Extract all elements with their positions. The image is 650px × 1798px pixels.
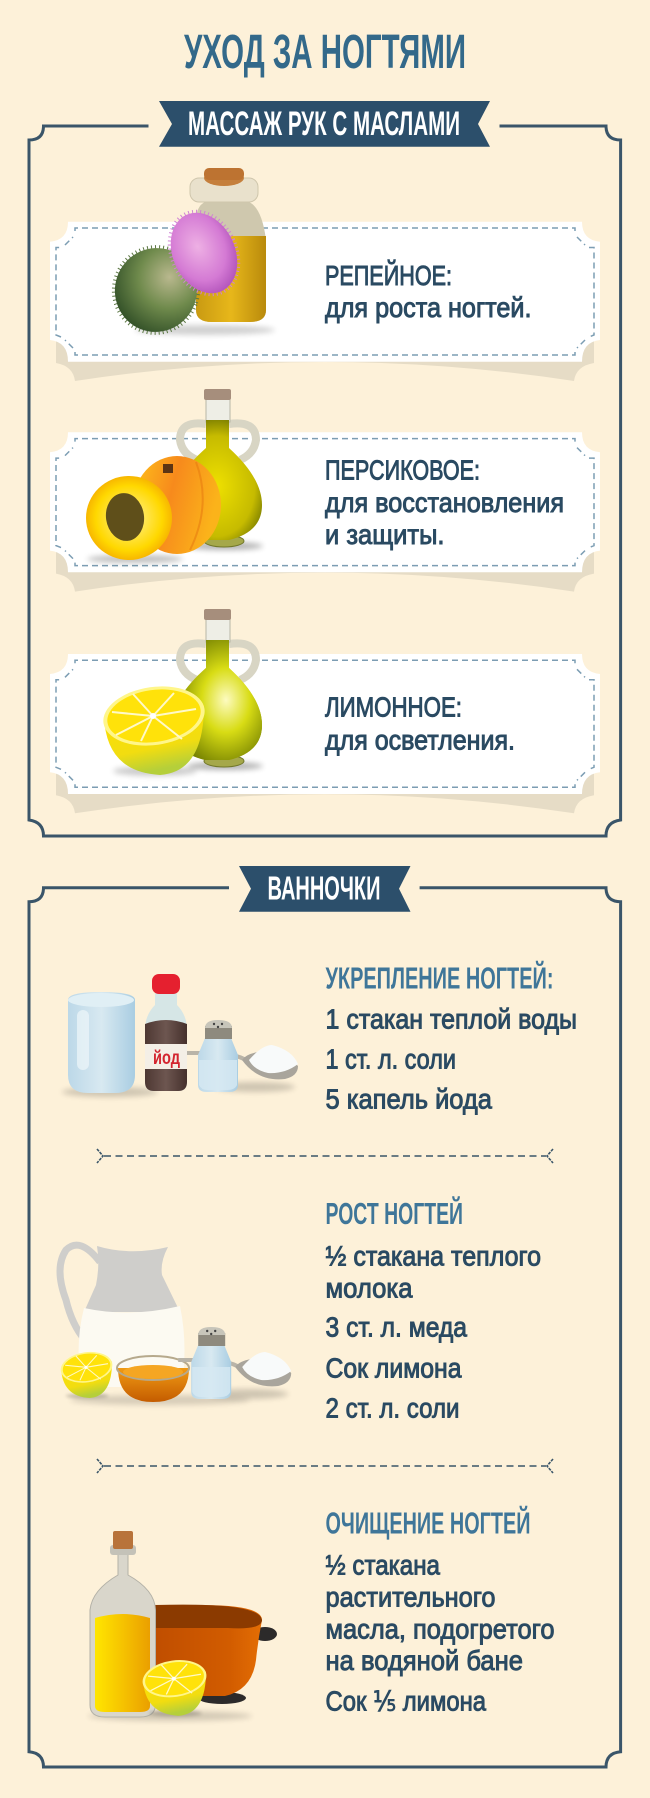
panel: nail baths — [29, 866, 621, 1767]
icon: glass, iodine, salt: йод — [153, 1048, 180, 1069]
ribbon heading: massage: МАССАЖ РУК С МАСЛАМИ — [188, 105, 460, 143]
recipe text: growth: 2 ст. л. соли — [326, 1393, 460, 1424]
recipe text: strengthening: 1 стакан теплой воды — [326, 1003, 577, 1034]
card text: peach: для восстановления — [325, 487, 564, 518]
recipe: cleansing — [88, 1504, 554, 1721]
card text: burdock: РЕПЕЙНОЕ: — [325, 260, 452, 291]
recipe text: cleansing: ОЧИЩЕНИЕ НОГТЕЙ — [326, 1504, 530, 1540]
card text: peach: ПЕРСИКОВОЕ: — [325, 454, 480, 486]
card text: peach: и защиты. — [325, 519, 444, 550]
recipe text: growth: Сок лимона — [326, 1353, 462, 1384]
recipe text: cleansing — [326, 1504, 554, 1717]
recipe text: growth: РОСТ НОГТЕЙ — [326, 1195, 463, 1231]
icon: milk jug, lemon, honey, salt — [59, 1245, 291, 1405]
recipe text: cleansing: растительного — [326, 1582, 496, 1613]
panel: oil hand massage — [29, 101, 621, 836]
recipe text: strengthening: 5 капель йода — [326, 1083, 492, 1114]
panel frame — [29, 888, 621, 1767]
title: УХОД ЗА НОГТЯМИ — [184, 26, 466, 79]
recipe text: growth — [326, 1195, 541, 1424]
recipe text: strengthening: 1 ст. л. соли — [326, 1043, 456, 1074]
card text: burdock: для роста ногтей. — [325, 292, 532, 323]
recipe text: growth: ½ стакана теплого — [326, 1241, 541, 1272]
recipe text: growth: 3 ст. л. меда — [326, 1312, 467, 1343]
recipe text: cleansing: масла, подогретого — [326, 1613, 554, 1644]
ribbon heading: baths: ВАННОЧКИ — [268, 870, 380, 906]
recipe: strengthening — [62, 959, 577, 1114]
icon: peach oil jar and peaches — [86, 389, 263, 563]
recipe text: growth: молока — [326, 1272, 413, 1303]
recipe text: cleansing: на водяной бане — [326, 1645, 523, 1676]
card: burdock oil — [50, 168, 600, 381]
recipe text: strengthening — [326, 959, 577, 1114]
icon: oil bottle, pot, lemon — [88, 1531, 277, 1721]
icon: lemon oil jar and lemon — [99, 609, 263, 776]
recipe: growth — [59, 1195, 541, 1424]
recipe text: cleansing: ½ стакана — [326, 1549, 440, 1580]
panel frame — [29, 126, 621, 836]
card: lemon oil — [50, 609, 600, 813]
ribbon heading: baths — [239, 866, 410, 912]
card text: lemon: для осветления. — [325, 724, 515, 755]
icon: burdock oil bottle and flower — [102, 168, 275, 345]
card text: lemon: ЛИМОННОЕ: — [325, 692, 462, 723]
card text: burdock — [325, 260, 532, 323]
recipe text: cleansing: Сок ⅕ лимона — [326, 1686, 486, 1717]
ribbon heading: massage — [159, 101, 490, 147]
icon: glass, iodine, salt — [62, 974, 298, 1097]
card text: peach — [325, 454, 564, 550]
card: peach oil — [50, 389, 600, 592]
card text: lemon — [325, 692, 515, 755]
